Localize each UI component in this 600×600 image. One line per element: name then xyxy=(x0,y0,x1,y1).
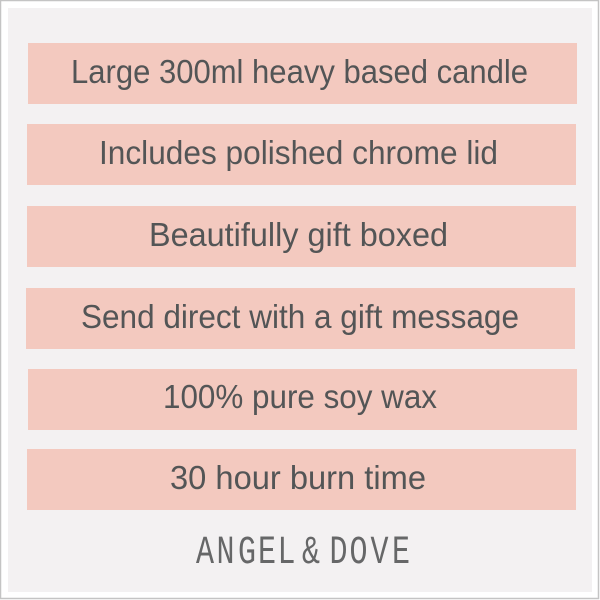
feature bar: chrome lid xyxy=(27,124,576,185)
feature bar: soy wax: 100% pure soy wax xyxy=(163,378,437,415)
feature bar: gift boxed xyxy=(27,206,576,267)
feature bar: burn time xyxy=(27,449,576,510)
feature bar: gift message: Send direct with a gift message xyxy=(81,298,519,335)
feature bar: large candle xyxy=(28,43,577,104)
feature bar: soy wax xyxy=(28,369,577,430)
feature bar: burn time: 30 hour burn time xyxy=(170,459,426,496)
feature bar: large candle: Large 300ml heavy based candle xyxy=(71,53,528,90)
feature bar: gift message xyxy=(26,288,575,349)
feature bar: chrome lid: Includes polished chrome lid xyxy=(99,134,498,171)
feature bar: gift boxed: Beautifully gift boxed xyxy=(149,216,448,253)
brand logo: ANGEL&DOVE xyxy=(196,530,410,575)
